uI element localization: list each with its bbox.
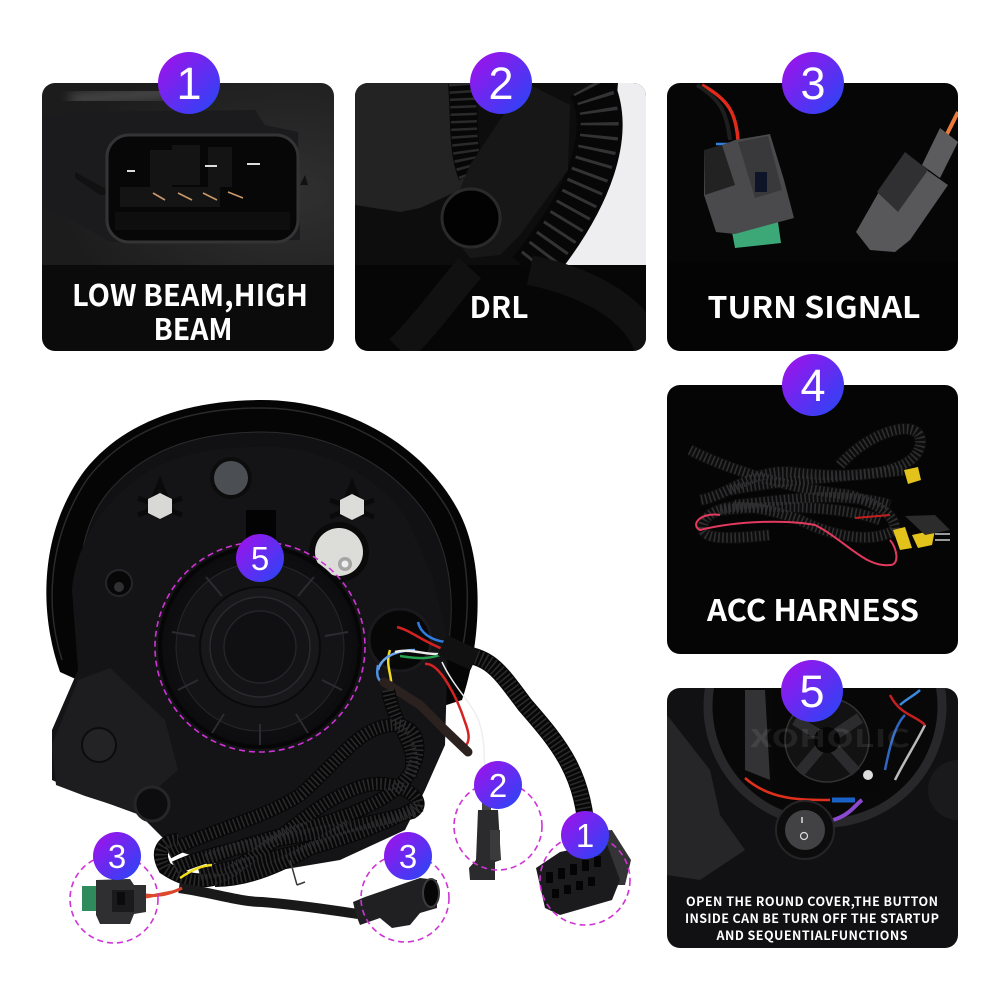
blurred background cable bbox=[70, 92, 170, 100]
corrugated tubes bbox=[462, 83, 600, 272]
rectangular slot bbox=[246, 510, 276, 545]
adjuster bolt bbox=[106, 570, 132, 596]
badge 3: 3 bbox=[800, 58, 826, 109]
housing right bbox=[928, 760, 958, 820]
caption band bbox=[42, 265, 334, 351]
badge 1 on lamp bbox=[561, 811, 609, 859]
badge 5 on lamp: 5 bbox=[251, 540, 269, 577]
badge 1 on lamp: 1 bbox=[576, 817, 594, 854]
badge 3 bbox=[782, 52, 844, 114]
caption band bbox=[667, 887, 958, 948]
badge 3 left on lamp: 3 bbox=[108, 838, 126, 875]
connector mouth bbox=[107, 135, 298, 242]
harness photo bbox=[690, 429, 920, 565]
panel: turn signal bbox=[667, 83, 958, 351]
connector 1 bbox=[536, 830, 631, 915]
side tabs bbox=[75, 172, 308, 195]
yellow connectors and fuse bbox=[893, 467, 950, 550]
wire grommet and coloured wires bbox=[369, 609, 485, 775]
badge 2: 2 bbox=[488, 58, 514, 109]
housing outer ring bbox=[46, 400, 478, 720]
caption band bbox=[667, 262, 958, 351]
caption: BEAM bbox=[154, 305, 232, 349]
caption bbox=[686, 896, 938, 942]
dashed callout circles bbox=[70, 542, 630, 943]
panel: low beam, high beam bbox=[42, 83, 334, 351]
lamp housing left bbox=[667, 715, 745, 880]
panel: ACC harness bbox=[667, 385, 958, 654]
rear body plate bbox=[52, 447, 448, 875]
rocker switch bbox=[776, 801, 834, 859]
badge 5 bbox=[781, 660, 843, 722]
white screw disc bbox=[309, 522, 369, 582]
caption bbox=[74, 284, 306, 340]
badge 4 bbox=[782, 354, 844, 416]
panel: button note bbox=[667, 688, 958, 948]
badge 3 left on lamp bbox=[93, 832, 141, 880]
badge 5: 5 bbox=[799, 666, 825, 717]
badge 4: 4 bbox=[800, 360, 826, 411]
badge 1 bbox=[158, 52, 220, 114]
caption band bbox=[355, 265, 646, 351]
caption: TURN SIGNAL bbox=[708, 283, 920, 327]
open socket ring bbox=[704, 688, 946, 827]
grey plug disc bbox=[210, 457, 252, 499]
DRL connector bbox=[442, 85, 570, 258]
corrugated looped harness bbox=[161, 690, 420, 880]
faint logo watermark: XOHOLIC bbox=[750, 719, 910, 754]
wires bbox=[745, 690, 925, 820]
badge 2 on lamp: 2 bbox=[489, 767, 507, 804]
fan bbox=[784, 700, 873, 783]
round cover bbox=[160, 547, 360, 747]
main product: headlight rear view bbox=[46, 400, 631, 943]
white backdrop bbox=[566, 83, 646, 265]
left connector bbox=[704, 134, 794, 248]
badge 2 on lamp bbox=[474, 761, 522, 809]
badge 1: 1 bbox=[176, 58, 202, 109]
right connector bbox=[856, 112, 958, 252]
caption: OPEN THE ROUND COVER,THE BUTTON bbox=[686, 891, 938, 910]
connector 3 left bbox=[82, 879, 172, 924]
heat-shrink lead bbox=[384, 682, 468, 752]
badge 5 on lamp bbox=[236, 534, 284, 582]
connector 2 bbox=[469, 795, 501, 880]
caption: DRL bbox=[470, 283, 528, 327]
red and black wires bbox=[697, 85, 738, 144]
badge 3 middle on lamp bbox=[384, 832, 432, 880]
badge 2 bbox=[470, 52, 532, 114]
connector 3 middle bbox=[353, 878, 439, 928]
caption: ACC HARNESS bbox=[706, 586, 919, 630]
left mounting block bbox=[52, 668, 178, 821]
caption: AND SEQUENTIALFUNCTIONS bbox=[716, 925, 908, 944]
corrugated harness to connector 1 bbox=[442, 645, 587, 840]
connector body bbox=[172, 110, 300, 240]
hex nuts bbox=[138, 482, 374, 520]
caption: LOW BEAM,HIGH bbox=[72, 271, 308, 315]
caption: INSIDE CAN BE TURN OFF THE STARTUP bbox=[685, 908, 939, 927]
panel: DRL bbox=[355, 83, 650, 351]
badge 3 middle on lamp: 3 bbox=[399, 838, 417, 875]
background disc bbox=[355, 83, 470, 212]
fabric lead and wires bbox=[146, 860, 358, 914]
